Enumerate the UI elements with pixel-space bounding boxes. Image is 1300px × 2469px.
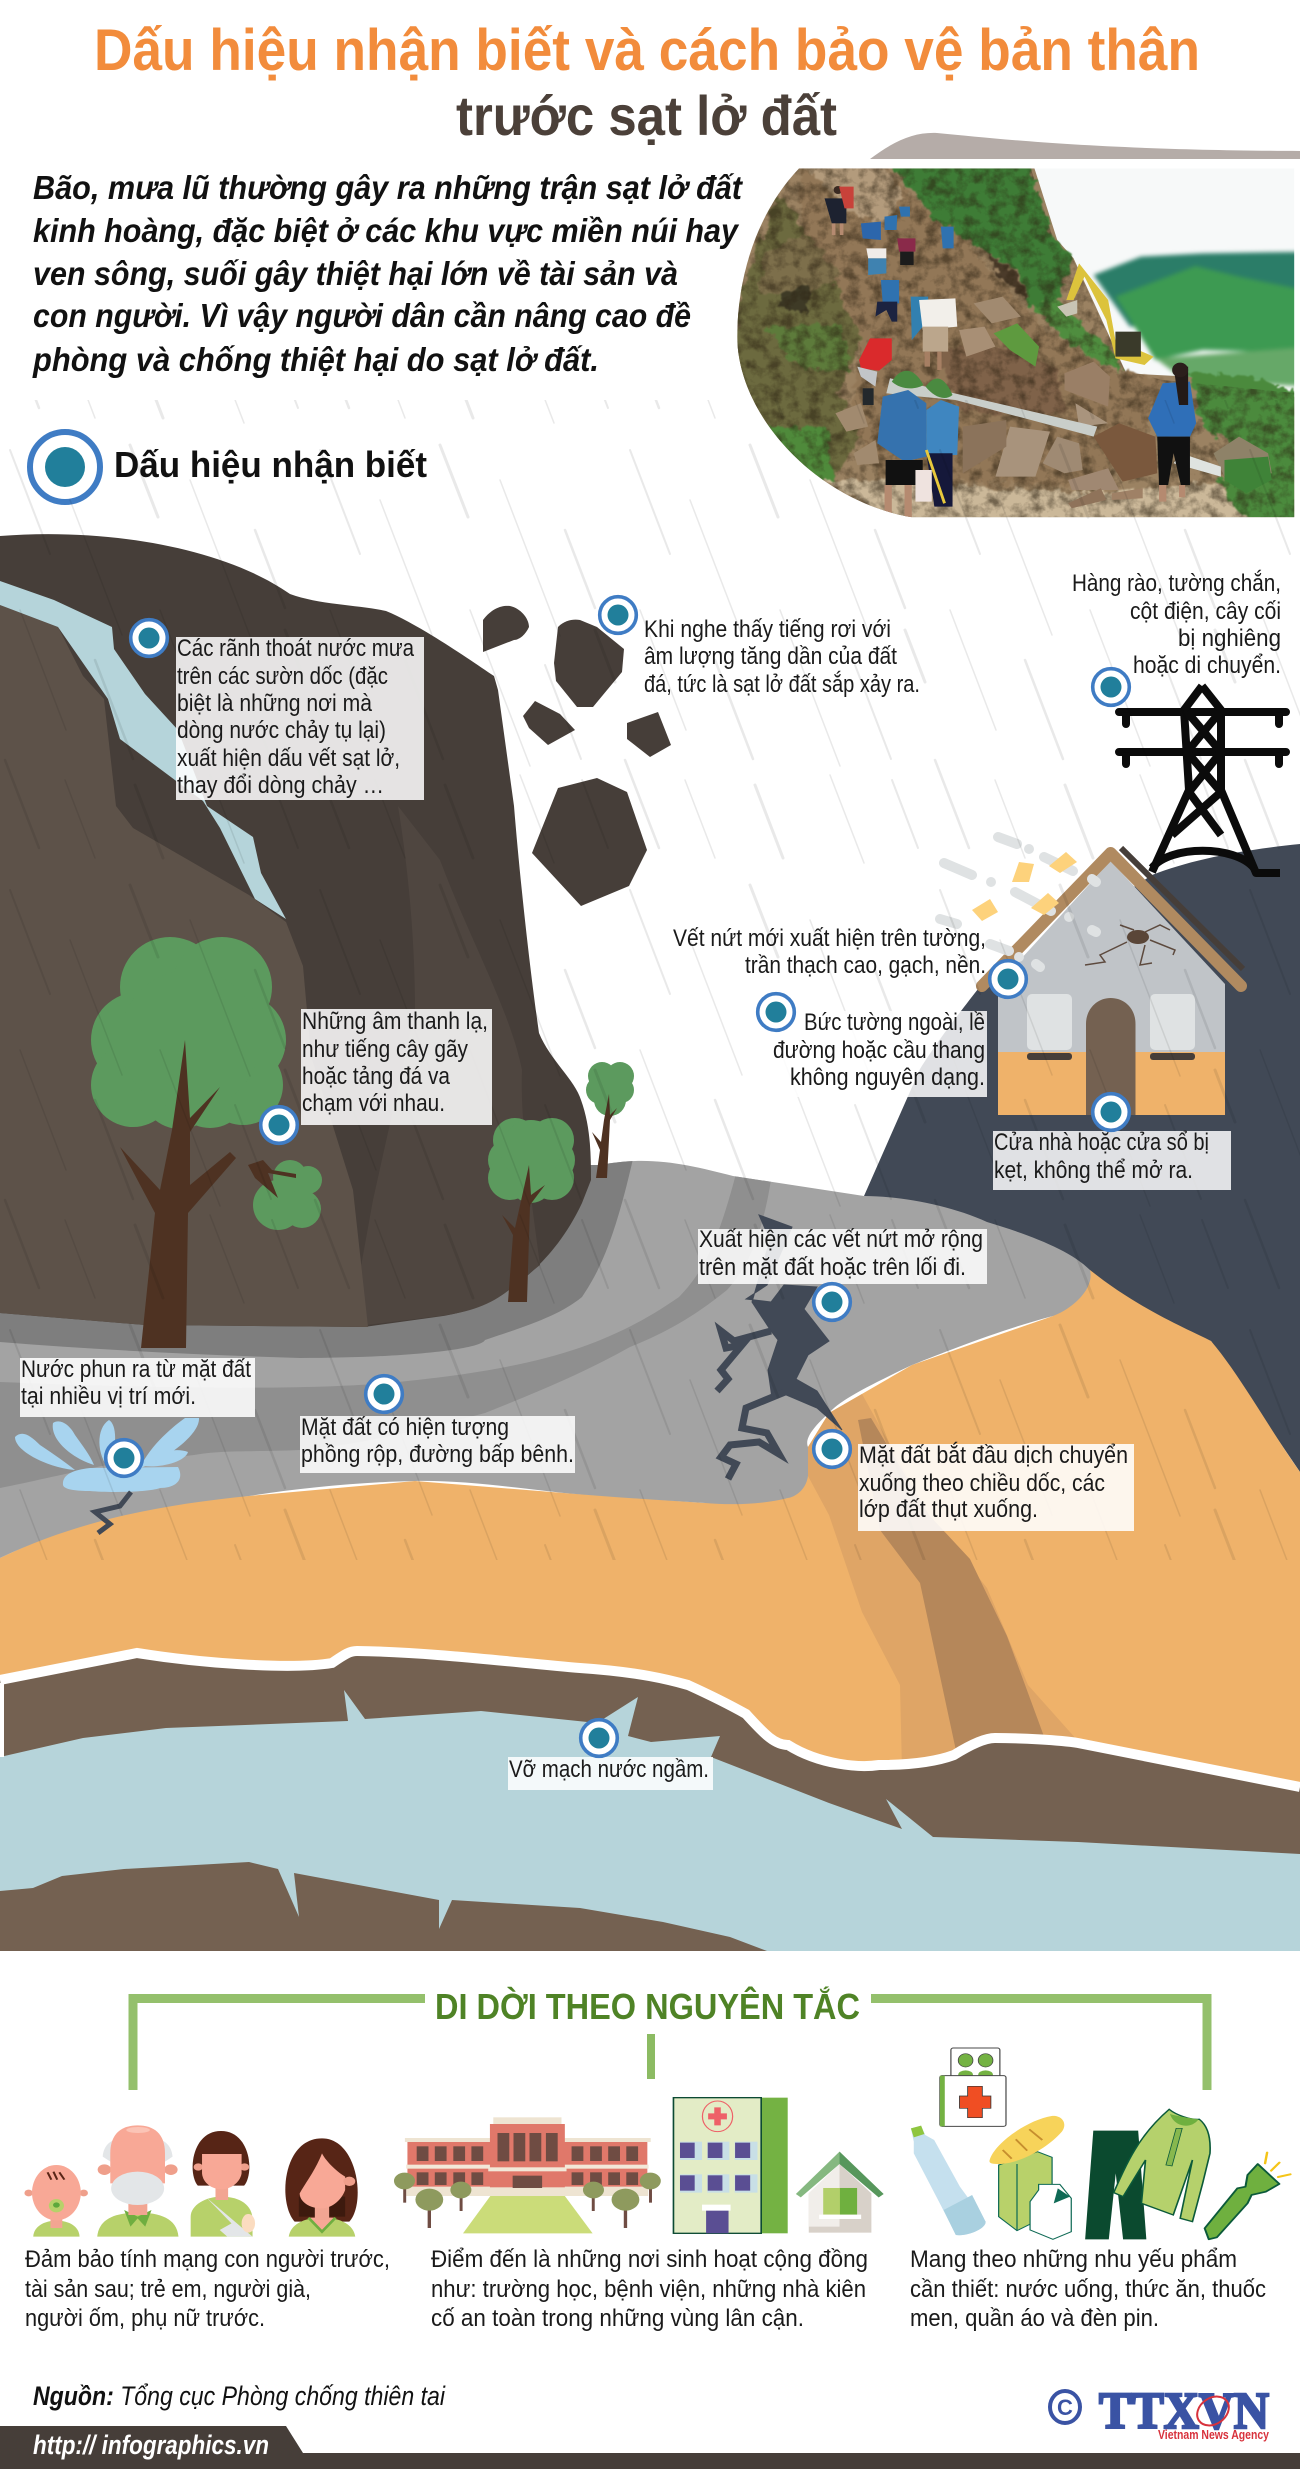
intro paragraph (32, 169, 744, 378)
callout: tilting fences and poles: bị nghiêng (1178, 625, 1281, 652)
callout: broken groundwater: Vỡ mạch nước ngầm. (509, 1756, 709, 1783)
heading: relocation principles (133, 1985, 1207, 2090)
landslide slope strip (808, 1394, 1086, 1770)
icon: food (989, 2116, 1071, 2239)
icon: vulnerable people (24, 2125, 358, 2237)
callout: wall cracks (673, 925, 986, 979)
callout: drainage channels: dòng nước chảy tụ lại) (177, 717, 386, 744)
callout: drainage channels: biệt là những nơi mà (177, 690, 373, 717)
orange soil (0, 1270, 1300, 1800)
callout: deformed walls: đường hoặc cầu thang (773, 1037, 985, 1064)
fallen branch and bush (248, 1160, 322, 1230)
icon: first aid kit and medicine (940, 2048, 1006, 2126)
icon: water bottle (911, 2126, 986, 2235)
callout: strange sounds: chạm với nhau. (302, 1090, 445, 1117)
rock blocks (835, 297, 1272, 508)
icon: flashlight (1205, 2153, 1290, 2239)
roof debris (940, 837, 1096, 967)
callout: bulging ground (300, 1414, 575, 1473)
callout: tilting fences and poles: hoặc di chuyển. (1133, 652, 1281, 679)
intro paragraph: ven sông, suối gây thiệt hại lớn về tài sản và (33, 255, 678, 292)
callout: deformed walls: không nguyên dạng. (790, 1064, 985, 1091)
column text: priorities: tài sản sau; trẻ em, người già, (25, 2276, 311, 2303)
callout: bulging ground: Mặt đất có hiện tượng (301, 1414, 509, 1441)
small tree (586, 1062, 634, 1178)
landslide scene illustration (0, 400, 1300, 1951)
intro paragraph: phòng và chống thiệt hại do sạt lở đất. (32, 341, 599, 378)
intro paragraph: con người. Vì vậy người dân cần nâng cao đề (33, 297, 691, 334)
dark cliff (0, 534, 591, 1327)
big tree (91, 937, 286, 1348)
column text: essentials: cần thiết: nước uống, thức ăn, thuốc (910, 2276, 1266, 2303)
callout: stuck doors: Cửa nhà hoặc cửa sổ bị (994, 1129, 1209, 1156)
water fountain (15, 1418, 199, 1533)
house (940, 837, 1243, 1115)
heading: relocation principles: DI DỜI THEO NGUYÊN TẮC (435, 1985, 860, 2027)
callout: widening cracks: Xuất hiện các vết nứt mở rộng (699, 1226, 983, 1253)
callout: ground shifting: Mặt đất bắt đầu dịch chuyển (859, 1442, 1128, 1469)
callout: tilting fences and poles (1072, 570, 1281, 679)
callout: water spraying: Nước phun ra từ mặt đất (21, 1356, 251, 1383)
column text: priorities (25, 2246, 390, 2332)
title (94, 18, 1200, 147)
callout: widening cracks: trên mặt đất hoặc trên lối đi. (699, 1254, 966, 1281)
column text: destinations (431, 2246, 868, 2332)
source: Nguồn: Tổng cục Phòng chống thiên tai (33, 2381, 446, 2411)
lighter cliff face (0, 605, 368, 1327)
icon: sturdy house (796, 2152, 884, 2233)
callout: falling rock noise: âm lượng tăng dần của đất (644, 643, 897, 670)
column text: essentials: men, quần áo và đèn pin. (910, 2305, 1159, 2332)
footer bar (0, 2426, 1300, 2469)
callout: strange sounds: như tiếng cây gãy (302, 1036, 468, 1063)
cliff waterfall (0, 581, 286, 919)
electric pylon (1119, 686, 1286, 873)
section heading: signs (30, 432, 427, 502)
title: Dấu hiệu nhận biết và cách bảo vệ bản thân (94, 18, 1200, 83)
woman with long hair (285, 2138, 358, 2237)
old man (97, 2125, 178, 2237)
callout: bulging ground: phồng rộp, đường bấp bênh. (301, 1441, 574, 1468)
column text: priorities: người ốm, phụ nữ trước. (25, 2305, 265, 2332)
icon: clothes (1085, 2109, 1210, 2239)
callout: deformed walls (770, 1009, 987, 1097)
falling rocks (483, 606, 671, 906)
ground crack (717, 1215, 842, 1479)
callout: drainage channels: xuất hiện dấu vết sạt lở, (177, 745, 400, 772)
slate hillside (864, 844, 1300, 1472)
callout: drainage channels: trên các sườn dốc (đặc (177, 663, 388, 690)
callout: ground shifting: xuống theo chiều dốc, các (859, 1470, 1105, 1497)
callout: water spraying: tại nhiều vị trí mới. (21, 1383, 196, 1410)
underground soil layer (0, 1651, 1300, 1951)
callout: ground shifting (858, 1442, 1134, 1531)
column text: priorities: Đảm bảo tính mạng con người trước, (25, 2246, 390, 2273)
medium tree (488, 1118, 575, 1302)
rain (0, 400, 1300, 1560)
callout: stuck doors: kẹt, không thể mở ra. (994, 1157, 1193, 1184)
callout: falling rock noise: Khi nghe thấy tiếng rơi với (644, 616, 891, 643)
logo: TTXVN: TTXVN (1099, 2383, 1269, 2440)
intro paragraph: Bão, mưa lũ thường gây ra những trận sạt lở đất (33, 169, 744, 206)
footer bar: http:// infographics.vn (33, 2430, 269, 2460)
callout: drainage channels: thay đổi dòng chảy … (177, 772, 384, 799)
title: trước sạt lở đất (456, 84, 837, 147)
icon: school (394, 2117, 661, 2233)
photo: landslide rescue (730, 160, 1300, 527)
callout: deformed walls: Bức tường ngoài, lề (804, 1009, 985, 1036)
callout: water spraying (20, 1356, 255, 1417)
callout: strange sounds: hoặc tảng đá va (302, 1063, 451, 1090)
location markers (106, 597, 1129, 1756)
callout: drainage channels: Các rãnh thoát nước mưa (177, 635, 415, 662)
callout: drainage channels (176, 635, 424, 800)
column text: essentials (910, 2246, 1266, 2332)
column text: destinations: như: trường học, bệnh viện, những nhà kiên (431, 2276, 866, 2303)
callout: falling rock noise (644, 616, 920, 698)
excavator (1057, 263, 1154, 365)
callout: falling rock noise: đá, tức là sạt lở đất sắp xảy ra. (644, 671, 920, 698)
callout: wall cracks: Vết nứt mới xuất hiện trên tường, (673, 925, 986, 952)
section heading: signs: Dấu hiệu nhận biết (114, 444, 427, 485)
intro paragraph: kinh hoàng, đặc biệt ở các khu vực miền núi hay (33, 212, 740, 249)
callout: widening cracks (698, 1226, 987, 1284)
groundwater river (0, 1690, 1300, 1951)
rescue workers (825, 186, 1196, 517)
column text: destinations: Điểm đến là những nơi sinh hoạt cộng đồng (431, 2246, 868, 2273)
column text: destinations: cố an toàn trong những vùng lân cận. (431, 2305, 804, 2332)
callout: strange sounds: Những âm thanh lạ, (302, 1008, 488, 1035)
callout: strange sounds (301, 1008, 492, 1125)
grey ground with bands (0, 1150, 1100, 1570)
callout: wall cracks: trần thạch cao, gạch, nền. (745, 952, 986, 979)
woman with sling (191, 2131, 255, 2237)
baby (24, 2165, 88, 2237)
logo: TTXVN: Vietnam News Agency (1158, 2427, 1270, 2442)
column text: essentials: Mang theo những nhu yếu phẩm (910, 2246, 1237, 2273)
callout: ground shifting: lớp đất thụt xuống. (859, 1496, 1038, 1523)
callout: tilting fences and poles: cột điện, cây cối (1130, 598, 1281, 625)
logo: TTXVN: C (1057, 2395, 1073, 2420)
icon: hospital (673, 2098, 788, 2233)
callout: stuck doors (993, 1129, 1231, 1190)
